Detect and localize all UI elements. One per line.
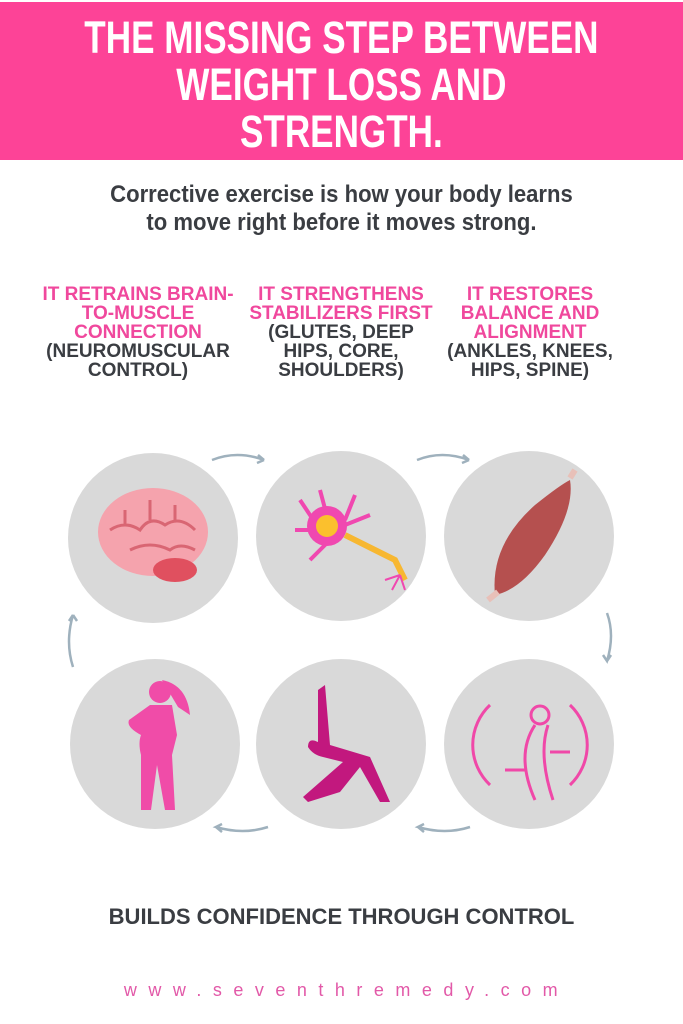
column 2 text xyxy=(249,284,433,381)
column 3 text: ALIGNMENT xyxy=(474,322,586,343)
title: STRENGTH. xyxy=(240,106,443,157)
circle: neuron xyxy=(256,451,426,621)
column 1 text xyxy=(42,284,234,381)
column 1 text: IT RETRAINS BRAIN- xyxy=(42,284,234,305)
circle: brain xyxy=(68,453,238,623)
circle: muscle xyxy=(444,451,614,621)
subtitle: Corrective exercise is how your body learns xyxy=(110,181,573,208)
column 1 text: (NEUROMUSCULAR xyxy=(46,341,230,362)
arrows xyxy=(69,455,611,832)
subtitle xyxy=(110,181,573,236)
column 3 text: (ANKLES, KNEES, xyxy=(447,341,613,362)
column 2 text: (GLUTES, DEEP xyxy=(268,322,414,343)
circle: yoga pose xyxy=(256,659,426,829)
subtitle: to move right before it moves strong. xyxy=(146,209,537,236)
footer tagline: BUILDS CONFIDENCE THROUGH CONTROL xyxy=(109,904,574,929)
title: THE MISSING STEP BETWEEN xyxy=(84,12,598,63)
header band xyxy=(0,2,683,160)
title: WEIGHT LOSS AND xyxy=(176,59,506,110)
circle: woman xyxy=(70,659,240,829)
column 3 text: BALANCE AND xyxy=(461,303,599,324)
column 1 text: CONNECTION xyxy=(74,322,202,343)
column 2 text: HIPS, CORE, xyxy=(283,341,399,362)
column 2 text: IT STRENGTHENS xyxy=(258,284,424,305)
column 1 text: CONTROL) xyxy=(88,360,188,381)
website url: www.seventhremedy.com xyxy=(124,980,569,1000)
column 2 text: STABILIZERS FIRST xyxy=(249,303,433,324)
circle: spine alignment xyxy=(444,659,614,829)
title xyxy=(84,12,598,157)
column 1 text: TO-MUSCLE xyxy=(82,303,194,324)
column 3 text: HIPS, SPINE) xyxy=(471,360,589,381)
column 3 text: IT RESTORES xyxy=(467,284,593,305)
column 2 text: SHOULDERS) xyxy=(278,360,404,381)
column 3 text xyxy=(447,284,613,381)
